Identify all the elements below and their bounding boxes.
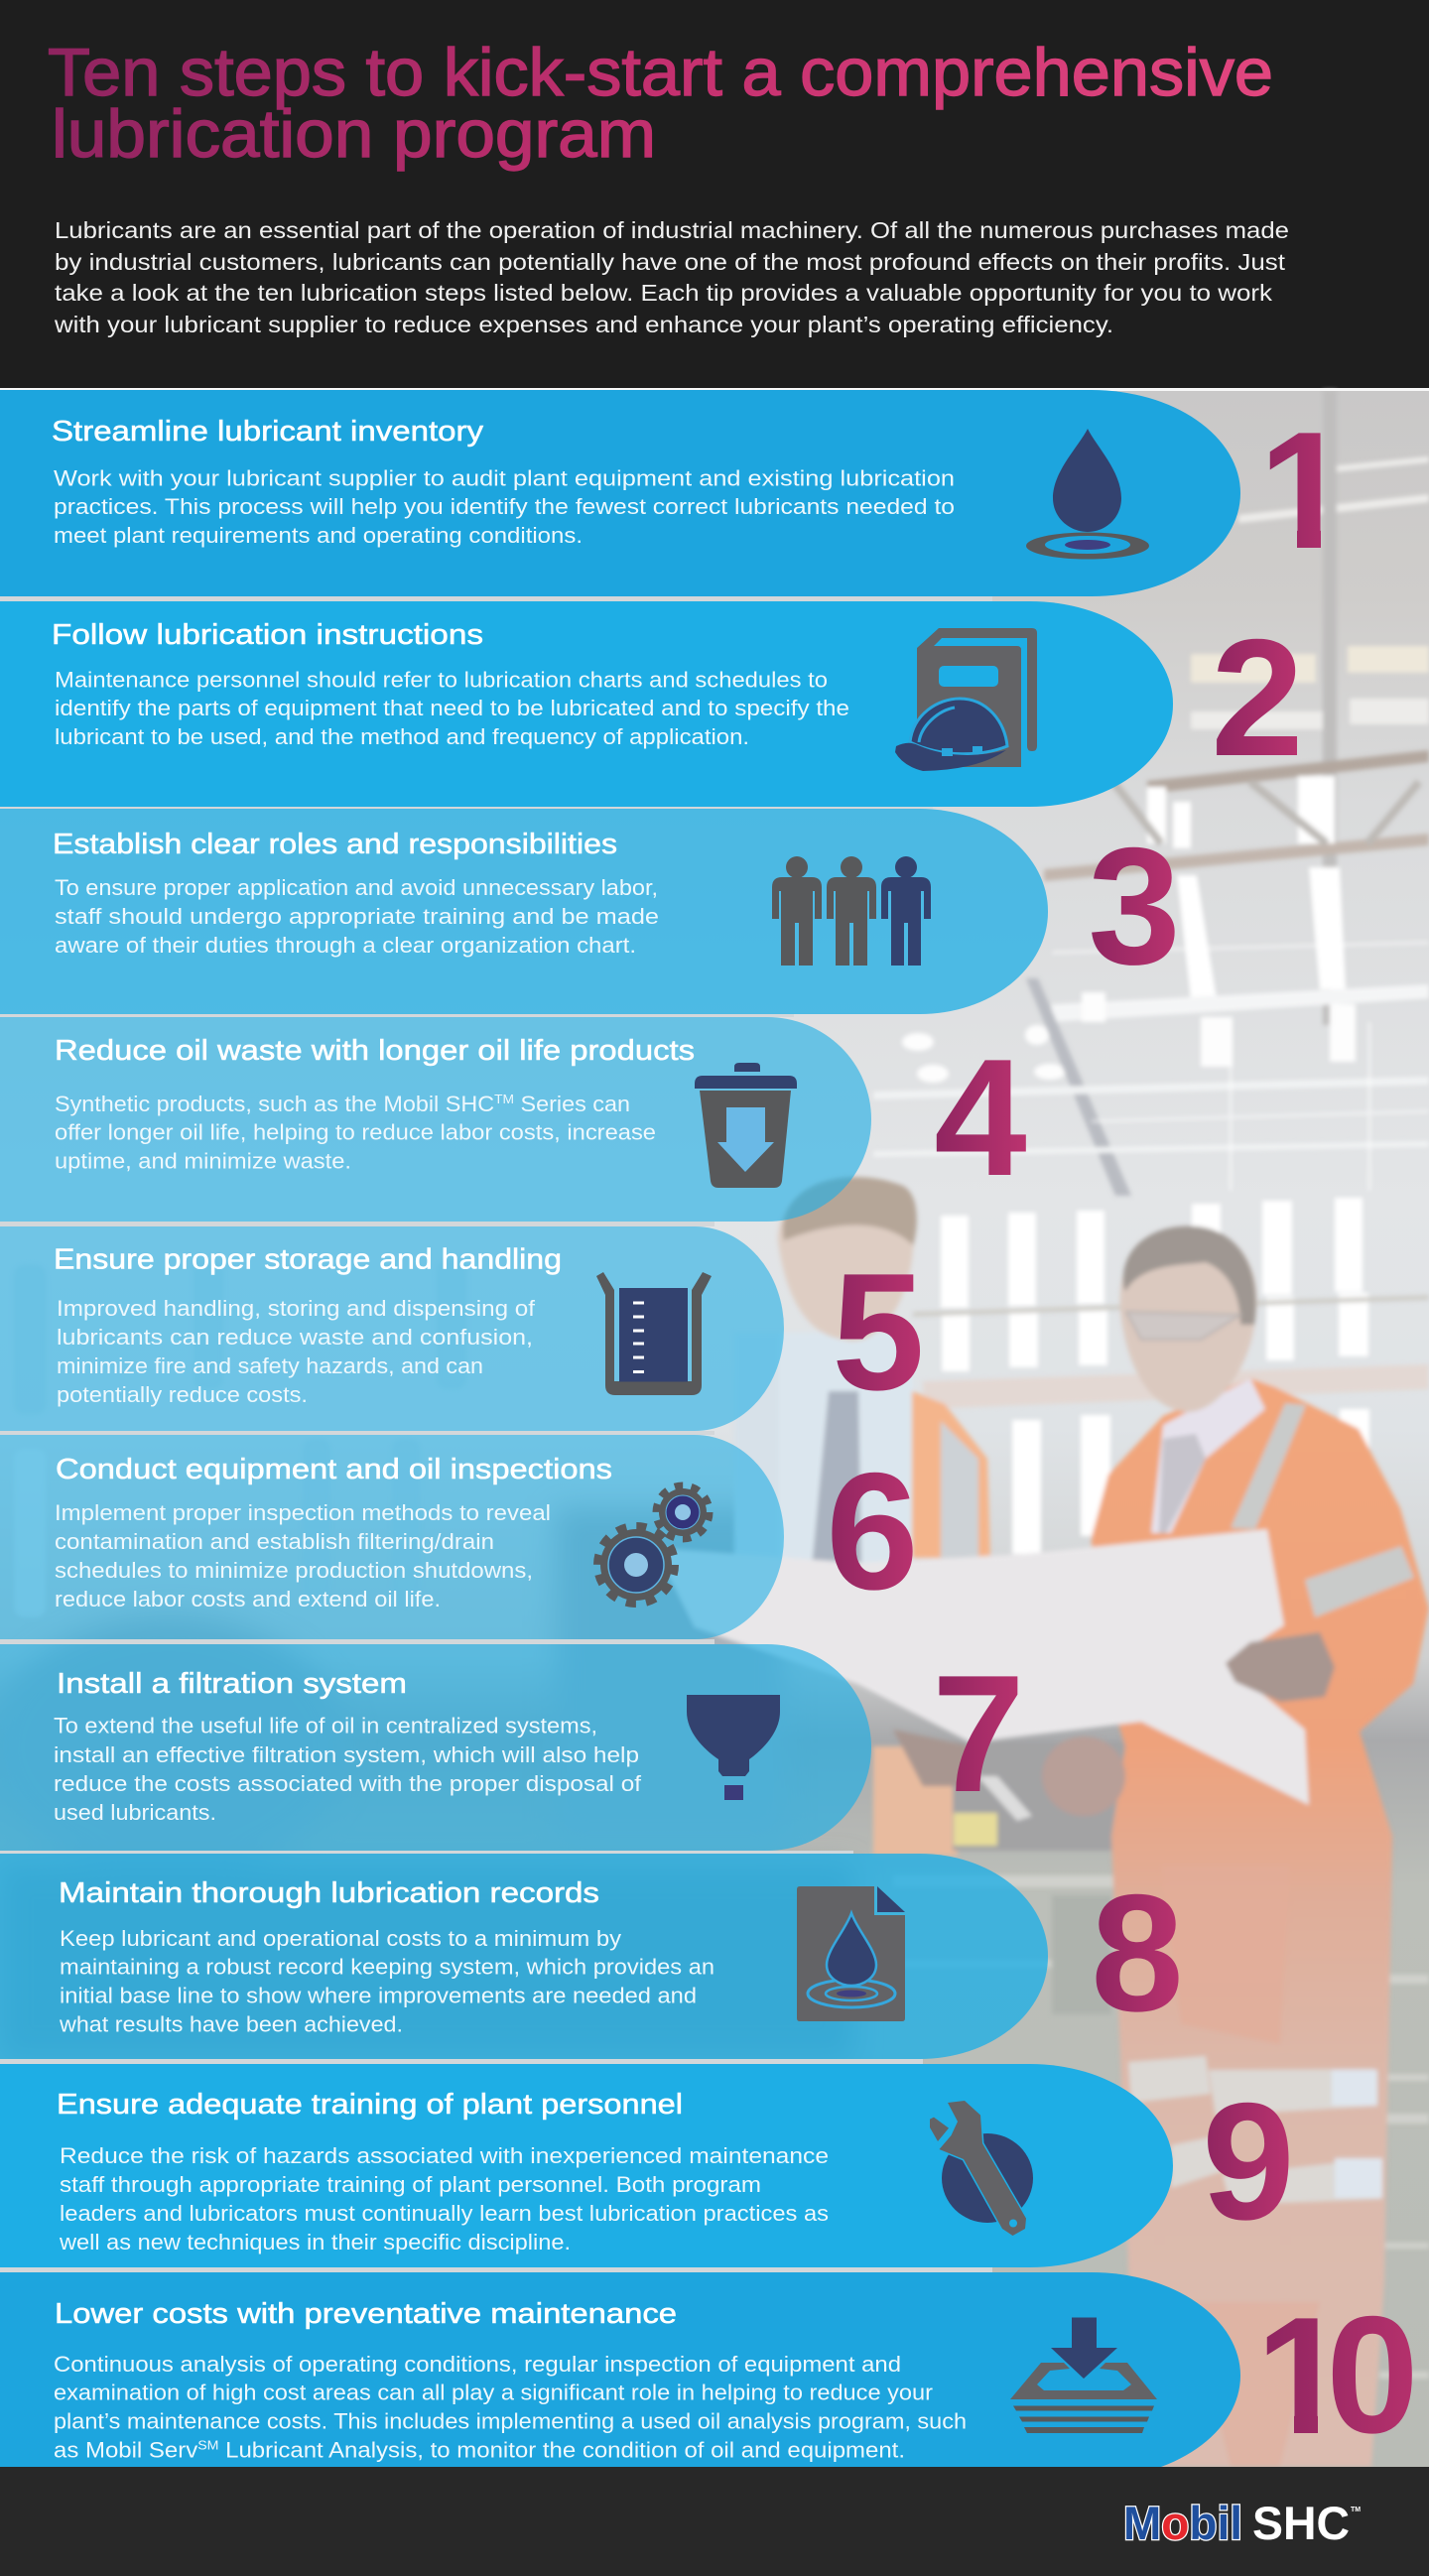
step 5 text: minimize fire and safety hazards, and can	[57, 1353, 483, 1378]
step 10 text: examination of high cost areas can all play a significant role in helping to reduce your	[54, 2380, 933, 2405]
step 6 text: reduce labor costs and extend oil life.	[55, 1587, 441, 1611]
icon: funnel	[687, 1695, 780, 1800]
step 10 text: plant’s maintenance costs. This includes implementing a used oil analysis program, such	[54, 2409, 967, 2433]
title: Ten steps to kick-start a comprehensive	[48, 35, 1273, 110]
step 9 text	[59, 2143, 829, 2254]
intro paragraph: with your lubricant supplier to reduce expenses and enhance your plant’s operating efficiency.	[54, 312, 1113, 337]
icon: three people	[772, 856, 931, 966]
title	[48, 35, 1273, 172]
step 10 heading: Lower costs with preventative maintenance	[55, 2298, 677, 2330]
blurred figures seen through translucent bands	[0, 1508, 853, 2059]
step 3 panel	[0, 809, 1181, 1014]
icon: measuring beaker	[596, 1272, 712, 1395]
step 4 text: uptime, and minimize waste.	[55, 1149, 351, 1173]
step 2 text: identify the parts of equipment that need to be lubricated and to specify the	[55, 696, 849, 720]
step 9 text: staff through appropriate training of plant personnel. Both program	[60, 2172, 761, 2197]
Mobil SHC logo: TM	[1351, 2507, 1361, 2513]
step 3 text: aware of their duties through a clear organization chart.	[55, 933, 636, 958]
step 8 text: initial base line to show where improvements are needed and	[60, 1983, 697, 2008]
intro paragraph: Lubricants are an essential part of the operation of industrial machinery. Of all the numerous purchases made	[55, 217, 1289, 243]
step 1 text: practices. This process will help you identify the fewest correct lubricants needed to	[54, 494, 955, 519]
step 1 heading: Streamline lubricant inventory	[52, 416, 484, 448]
number 9: 9	[1202, 2068, 1295, 2254]
step 7 panel	[0, 1640, 1025, 1851]
number 2: 2	[1211, 604, 1304, 791]
icon: oil drop	[1026, 429, 1149, 560]
step 7 text: reduce the costs associated with the proper disposal of	[54, 1771, 642, 1796]
icon: wrench and circle	[930, 2101, 1033, 2236]
engineer on the left	[734, 1177, 990, 1856]
engineer on the right	[1092, 1226, 1429, 2467]
step 6 text: Implement proper inspection methods to reveal	[55, 1500, 551, 1525]
step 7 text	[54, 1713, 642, 1825]
dark background below the plan	[953, 1741, 1131, 1851]
step 8 text: maintaining a robust record keeping system, which provides an	[60, 1955, 714, 1979]
step 3 heading: Establish clear roles and responsibilities	[53, 829, 617, 860]
Mobil SHC logo	[1123, 2497, 1361, 2549]
step 4 text: TM	[494, 1092, 514, 1106]
step 10 text	[54, 2352, 967, 2463]
number 10	[1266, 2316, 1412, 2434]
step 2 text: Maintenance personnel should refer to lubrication charts and schedules to	[55, 667, 828, 693]
step 8 text: Keep lubricant and operational costs to a minimum by	[60, 1926, 621, 1951]
step 8 heading: Maintain thorough lubrication records	[59, 1877, 599, 1909]
step 2 text	[55, 667, 849, 749]
step 4 text: Synthetic products, such as the Mobil SHC	[55, 1092, 468, 1116]
step 3 text: staff should undergo appropriate training and be made	[55, 904, 659, 929]
Mobil SHC logo: SHC	[1252, 2497, 1350, 2549]
number 6: 6	[826, 1438, 919, 1624]
step 8 text	[59, 1926, 714, 2036]
intro paragraph: take a look at the ten lubrication steps listed below. Each tip provides a valuable opportunity for you to work	[55, 280, 1273, 306]
Mobil SHC logo: Mobil	[1123, 2497, 1242, 2549]
step 2 text: lubricant to be used, and the method and frequency of application.	[55, 724, 749, 749]
step 4 text	[55, 1092, 656, 1173]
step 5 text: lubricants can reduce waste and confusion,	[57, 1325, 533, 1350]
step 10 text: as Mobil Serv	[54, 2437, 186, 2463]
step 9 heading: Ensure adequate training of plant personnel	[57, 2089, 683, 2121]
icon: gears	[598, 1486, 709, 1603]
step 1 text	[54, 466, 955, 548]
number 7: 7	[932, 1640, 1025, 1827]
number 10: 1	[1255, 2282, 1349, 2469]
step 1 text: Work with your lubricant supplier to audit plant equipment and existing lubrication	[54, 466, 955, 490]
step 2 panel	[0, 601, 1304, 807]
windows behind the engineers	[941, 1198, 1369, 1554]
intro paragraph: by industrial customers, lubricants can potentially have one of the most profound effects on their profits. Just	[55, 249, 1286, 275]
step 7 text: install an effective filtration system, which will also help	[54, 1742, 639, 1767]
step 1 panel	[0, 390, 1352, 596]
step 5 text: Improved handling, storing and dispensing of	[57, 1296, 536, 1321]
step 10 panel	[0, 2272, 1419, 2479]
number 3: 3	[1088, 813, 1181, 999]
step 3 text: To ensure proper application and avoid unnecessary labor,	[55, 875, 658, 900]
step 9 text: Reduce the risk of hazards associated with inexperienced maintenance	[60, 2143, 829, 2168]
step 6 text: contamination and establish filtering/drain	[55, 1529, 494, 1554]
blueprint plan held by engineers	[655, 1529, 1309, 1805]
step 4 text: Series can	[514, 1092, 630, 1116]
step 3 text	[55, 875, 659, 958]
step 8 text: what results have been achieved.	[59, 2012, 403, 2036]
icon: oil record document	[797, 1886, 905, 2021]
step 1 text: meet plant requirements and operating conditions.	[54, 523, 583, 548]
step 6 panel	[0, 1435, 919, 1639]
step 7 text: To extend the useful life of oil in centralized systems,	[54, 1713, 597, 1739]
step 4 heading: Reduce oil waste with longer oil life products	[55, 1035, 695, 1067]
step 10 text: SM	[197, 2437, 218, 2453]
icon: manual and hard hat	[895, 628, 1037, 771]
step 10 text: Continuous analysis of operating conditions, regular inspection of equipment and	[54, 2352, 901, 2377]
step 9 text: leaders and lubricators must continually learn best lubrication practices as	[60, 2201, 829, 2226]
number 4: 4	[934, 1024, 1027, 1211]
footer panel	[0, 2467, 1429, 2576]
step 8 panel	[0, 1854, 1184, 2059]
number 1: 1	[1258, 397, 1352, 583]
light separator lines	[0, 388, 1429, 391]
step 4 text: offer longer oil life, helping to reduce labor costs, increase	[55, 1119, 656, 1145]
step 6 text	[55, 1500, 551, 1611]
header panel	[0, 0, 1429, 390]
step 7 heading: Install a filtration system	[57, 1668, 407, 1700]
title: lubrication program	[52, 96, 656, 172]
step 6 heading: Conduct equipment and oil inspections	[56, 1454, 612, 1485]
step 5 heading: Ensure proper storage and handling	[54, 1244, 562, 1276]
intro paragraph	[54, 217, 1289, 337]
icon: tray with down arrow	[1010, 2318, 1157, 2433]
number 8: 8	[1091, 1860, 1184, 2046]
icon: waste bin with arrow	[695, 1063, 797, 1188]
number 10: 0	[1326, 2281, 1419, 2468]
step 10 text: Lubricant Analysis, to monitor the condition of oil and equipment.	[218, 2437, 905, 2463]
step 5 text	[57, 1296, 536, 1407]
step 7 text: used lubricants.	[54, 1800, 216, 1825]
step 4 panel	[0, 1017, 1027, 1222]
number 5: 5	[832, 1238, 925, 1425]
step 9 panel	[0, 2064, 1295, 2267]
step 5 panel	[0, 1226, 925, 1431]
step 6 text: schedules to minimize production shutdowns,	[55, 1558, 533, 1583]
step 9 text: well as new techniques in their specific discipline.	[59, 2230, 571, 2254]
step 2 heading: Follow lubrication instructions	[52, 619, 483, 651]
step 5 text: potentially reduce costs.	[57, 1382, 308, 1407]
